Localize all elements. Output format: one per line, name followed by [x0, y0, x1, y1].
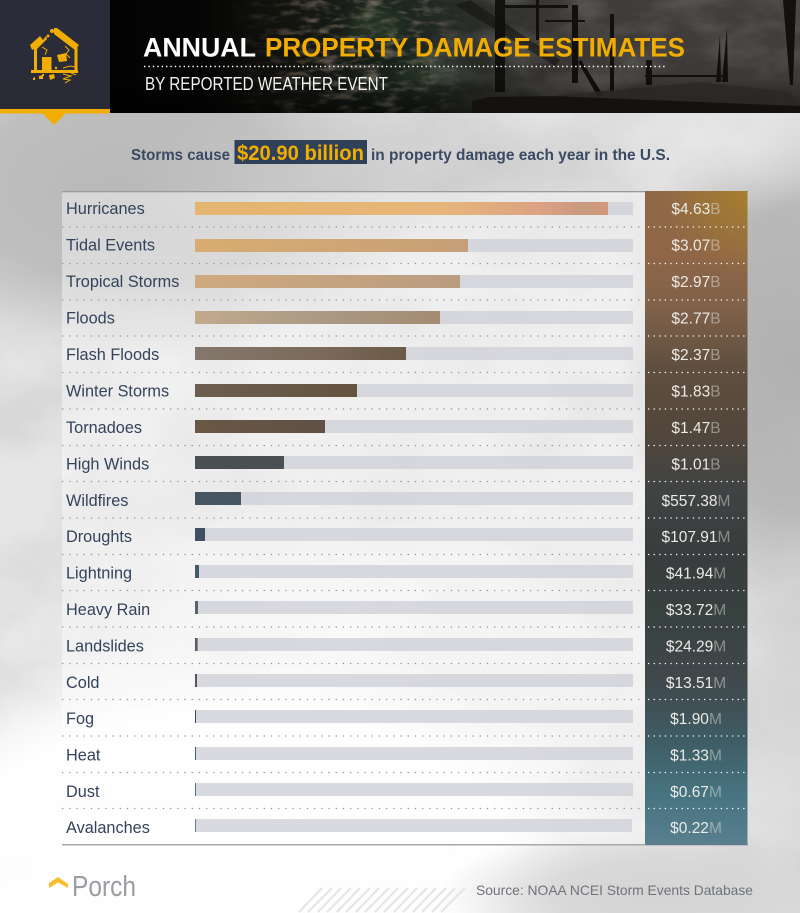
- row: Fog: $1.90M: [670, 711, 722, 728]
- row: Heat: $1.33M: [670, 748, 722, 764]
- row: Winter Storms: [66, 382, 721, 400]
- row: Flash Floods: Flash Floods: [66, 346, 159, 364]
- row: Avalanches: [66, 819, 722, 837]
- row: Droughts: [66, 528, 730, 546]
- row: Fog: Fog: [66, 710, 94, 728]
- headline callout: [131, 140, 670, 165]
- row: Avalanches: Avalanches: [66, 819, 150, 837]
- row: Winter Storms: $1.83B: [671, 384, 721, 400]
- row: Fog: [66, 710, 722, 728]
- subtitle: BY REPORTED WEATHER EVENT: [145, 74, 388, 94]
- row: Tropical Storms: $2.97B: [671, 274, 721, 291]
- row: Dust: [66, 783, 722, 801]
- row: Lightning: [66, 564, 726, 582]
- row: Dust: $0.67M: [670, 784, 722, 801]
- row: Cold: [66, 674, 726, 692]
- title: PROPERTY DAMAGE ESTIMATES: [265, 32, 685, 62]
- row: Heat: Heat: [66, 746, 101, 764]
- icon: damaged house: [30, 28, 79, 80]
- headline callout: $20.90 billion: [237, 142, 364, 165]
- row: Heavy Rain: $33.72M: [666, 602, 726, 619]
- panel: damage table: [62, 191, 748, 846]
- title: ANNUAL: [143, 32, 256, 62]
- row: Floods: $2.77B: [671, 310, 721, 328]
- row: Hurricanes: [66, 200, 721, 218]
- row: Avalanches: $0.22M: [670, 820, 722, 837]
- headline callout: in property damage each year in the U.S.: [371, 147, 670, 164]
- row: Tidal Events: Tidal Events: [66, 236, 155, 254]
- row: Tidal Events: $3.07B: [671, 238, 721, 254]
- row: Flash Floods: $2.37B: [671, 347, 721, 364]
- row: Landslides: [66, 638, 726, 656]
- row: Dust: Dust: [66, 783, 100, 801]
- row: Heavy Rain: [66, 601, 726, 619]
- row: Heat: [66, 746, 722, 764]
- header banner photo: burnt building: [110, 0, 800, 113]
- headline callout: Storms cause: [131, 147, 230, 164]
- row: Landslides: Landslides: [66, 638, 144, 656]
- row dividers: [62, 227, 745, 808]
- row: Winter Storms: Winter Storms: [66, 382, 169, 400]
- decorative hatch: [299, 888, 465, 912]
- row: Tidal Events: [66, 236, 721, 254]
- icon panel: [0, 0, 110, 125]
- row: Wildfires: [66, 492, 730, 510]
- row: Wildfires: Wildfires: [66, 492, 128, 510]
- row: High Winds: [66, 456, 721, 474]
- source note: Source: NOAA NCEI Storm Events Database: [476, 882, 753, 898]
- row: Floods: [66, 310, 721, 328]
- row: Cold: Cold: [66, 674, 100, 692]
- row: Tornadoes: $1.47B: [671, 420, 721, 437]
- row: Droughts: Droughts: [66, 528, 132, 546]
- row: Landslides: $24.29M: [666, 638, 726, 656]
- row: Tropical Storms: Tropical Storms: [66, 273, 179, 291]
- row: Hurricanes: Hurricanes: [66, 200, 145, 218]
- row: Tornadoes: Tornadoes: [66, 419, 142, 437]
- panel: value column: [645, 191, 748, 845]
- row: Droughts: $107.91M: [662, 529, 730, 546]
- logo: Porch: [49, 871, 136, 903]
- row: High Winds: High Winds: [66, 456, 149, 474]
- row: Floods: Floods: [66, 310, 115, 328]
- row: Lightning: $41.94M: [666, 566, 726, 582]
- row: Tropical Storms: [66, 273, 721, 291]
- row: Hurricanes: $4.63B: [671, 201, 721, 218]
- row: Tornadoes: [66, 419, 721, 437]
- row: Flash Floods: [66, 346, 721, 364]
- logo: Porch: Porch: [72, 871, 136, 903]
- row: Lightning: Lightning: [66, 564, 132, 582]
- row: Wildfires: $557.38M: [662, 493, 730, 510]
- row: Cold: $13.51M: [666, 675, 726, 692]
- row: High Winds: $1.01B: [671, 456, 721, 474]
- row: Heavy Rain: Heavy Rain: [66, 601, 150, 619]
